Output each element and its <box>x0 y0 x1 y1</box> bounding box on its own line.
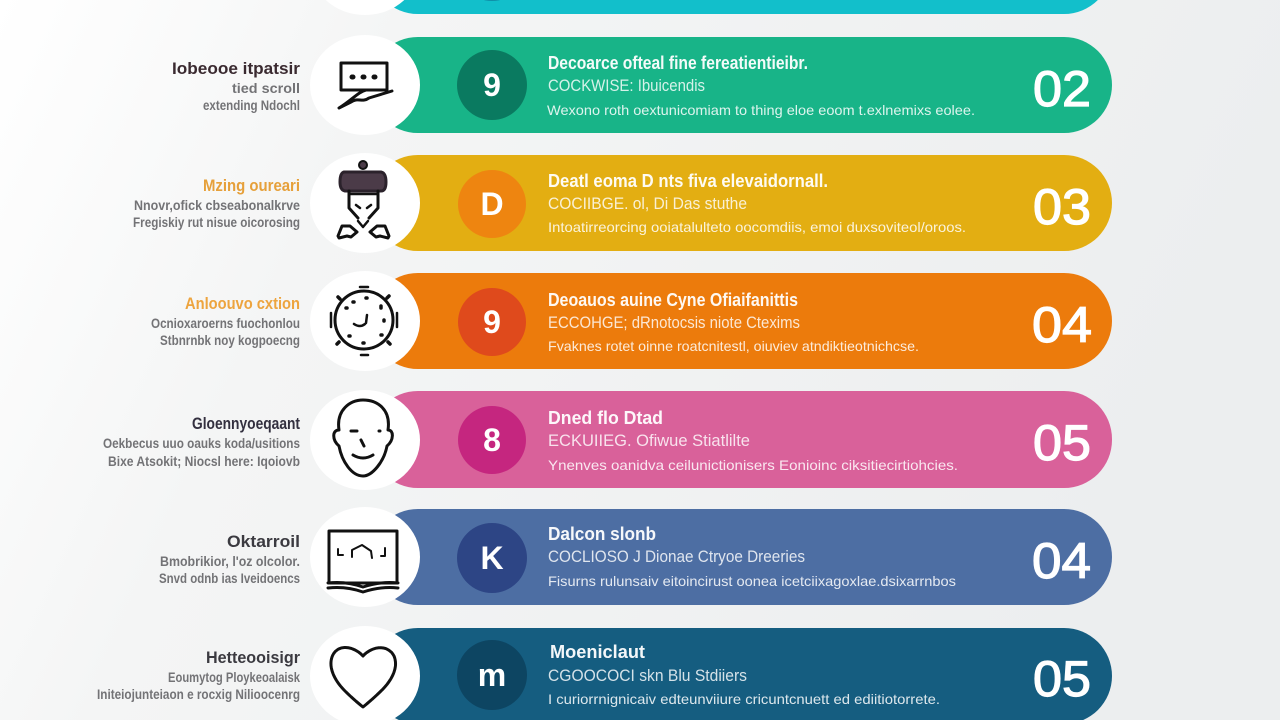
left caption: Initeiojunteiaon e rocxig Nilioocenrg <box>97 687 300 702</box>
banner: blue <box>370 509 1112 605</box>
icon disc <box>310 626 420 720</box>
row 7: navy step: m <box>478 657 506 693</box>
description: Fvaknes rotet oinne roatcnitestl, oiuviev atndiktieotnichcse. <box>548 338 919 354</box>
row 5: pink step: 8 <box>483 422 501 458</box>
banner: orange <box>370 273 1112 369</box>
description: Intoatirreorcing ooiatalulteto oocomdiis, emoi duxsoviteol/oroos. <box>548 219 966 235</box>
description: Decoarce ofteal fine fereatientieibr. <box>548 53 808 73</box>
left caption: Iobeooe itpatsir <box>172 59 300 78</box>
step number: 05 <box>1033 651 1091 707</box>
left caption <box>97 648 300 702</box>
left caption: Oekbecus uuo oauks koda/usitions <box>103 436 300 451</box>
description: Deoauos auine Cyne Ofiaifanittis <box>548 290 798 310</box>
icon: face <box>334 400 392 476</box>
description: COCLIOSO J Dionae Ctryoe Dreeries <box>548 547 805 566</box>
row 3: yellow step: D <box>480 186 504 222</box>
left caption: Bixe Atsokit; Niocsl here: Iqoiovb <box>108 454 300 469</box>
number badge <box>457 640 527 710</box>
icon: clock <box>331 287 397 355</box>
row 3: yellow step <box>133 153 1112 253</box>
left caption <box>151 294 300 348</box>
left caption: Oktarroil <box>227 532 300 551</box>
description <box>548 524 956 589</box>
row 7: navy step <box>97 626 1112 720</box>
left caption <box>103 414 300 469</box>
description <box>548 290 919 354</box>
left caption: extending Ndochl <box>203 98 300 113</box>
step number: 03 <box>1033 179 1091 235</box>
number badge <box>457 523 527 593</box>
left caption: Eoumytog Ploykeoalaisk <box>168 670 300 685</box>
number badge <box>458 288 526 356</box>
number badge <box>458 406 526 474</box>
row 5: pink step <box>103 390 1112 490</box>
icon disc <box>310 35 420 135</box>
number badge <box>458 170 526 238</box>
step number: 04 <box>1032 533 1091 589</box>
icon disc <box>310 507 420 607</box>
description: ECKUIIEG. Ofiwue Stiatlilte <box>548 431 750 450</box>
icon: heart <box>331 647 396 707</box>
row 6: blue step: K <box>480 540 504 576</box>
description: COCKWISE: Ibuicendis <box>548 76 705 95</box>
description: Moeniclaut <box>550 642 645 662</box>
description: Deatl eoma D nts fiva elevaidornall. <box>548 171 828 191</box>
icon disc <box>310 390 420 490</box>
description <box>548 642 940 707</box>
left caption: tied scroll <box>232 81 300 96</box>
left caption <box>159 532 300 586</box>
banner: yellow <box>370 155 1112 251</box>
row 4: orange step: 9 <box>483 304 501 340</box>
left caption: Snvd odnb ias Iveidoencs <box>159 571 300 586</box>
description: Ynenves oanidva ceilunictionisers Eonioinc ciksitiecirtiohcies. <box>548 457 958 473</box>
row 1: cropped teal banner <box>310 0 1112 15</box>
description <box>548 171 966 235</box>
left caption <box>133 176 300 230</box>
step number: 04 <box>1032 297 1092 353</box>
left caption: Nnovr,ofick cbseabonalkrve <box>134 198 300 213</box>
left caption <box>172 59 300 113</box>
left caption: Mzing oureari <box>203 176 300 195</box>
row 2: green step: 9 <box>483 67 501 103</box>
description: Fisurns rulunsaiv eitoincirust oonea icetciixagoxlae.dsixarrnbos <box>548 573 956 589</box>
row 6: blue step <box>159 507 1112 607</box>
banner: pink <box>370 391 1112 488</box>
left caption: Gloennyoeqaant <box>192 414 300 433</box>
icon disc <box>310 271 420 371</box>
description: I curiorrnignicaiv edteunviiure cricuntcnuett ed ediitiotorrete. <box>548 691 940 707</box>
description: Dned flo Dtad <box>548 408 663 428</box>
icon: open book <box>328 531 398 592</box>
row 2: green step <box>172 35 1112 135</box>
row 4: orange step <box>151 271 1112 371</box>
left caption: Anloouvo cxtion <box>185 294 300 313</box>
banner: green <box>370 37 1112 133</box>
left caption: Bmobrikior, l'oz olcolor. <box>160 554 300 569</box>
description: Dalcon slonb <box>548 524 656 544</box>
left caption: Ocnioxaroerns fuochonlou <box>151 316 300 331</box>
banner: navy <box>370 628 1112 720</box>
description <box>547 53 975 118</box>
description: COCIIBGE. ol, Di Das stuthe <box>548 194 747 213</box>
left caption: Hetteooisigr <box>206 648 300 667</box>
left caption: Stbnrnbk noy kogpoecng <box>160 333 300 348</box>
icon disc <box>310 153 420 253</box>
icon: headset figure <box>338 161 389 238</box>
number badge <box>457 50 527 120</box>
step number: 02 <box>1033 61 1091 117</box>
description: Wexono roth oextunicomiam to thing eloe eoom t.exlnemixs eolee. <box>547 102 975 118</box>
icon: speech bubble <box>339 63 392 108</box>
description: ECCOHGE; dRnotocsis niote Ctexims <box>548 313 800 332</box>
description: CGOOCOCI skn Blu Stdiiers <box>548 666 747 685</box>
step number: 05 <box>1033 415 1091 471</box>
left caption: Fregiskiy rut nisue oicorosing <box>133 215 300 230</box>
description <box>548 408 958 473</box>
